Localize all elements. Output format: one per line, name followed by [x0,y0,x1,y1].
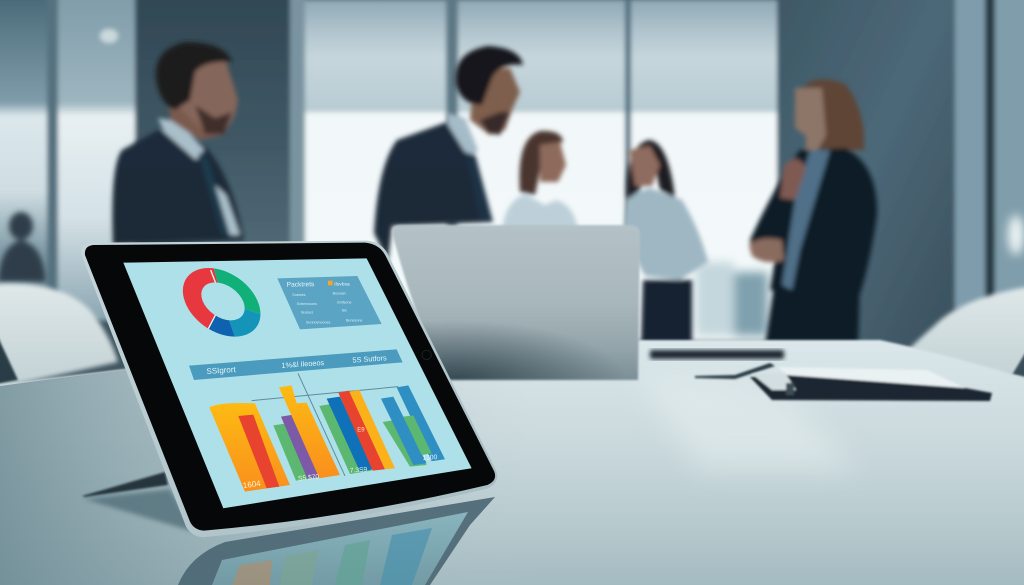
data table panel [277,276,382,329]
chair: left [0,284,118,388]
chair armrest: right dark accent [1012,345,1024,378]
tablet reflection on table [178,497,495,585]
data table panel: Sls [342,309,347,313]
chart header bar [189,349,403,380]
data table panel: Bnifsone [337,300,352,304]
chair: right [908,285,1024,382]
person: man in centre [374,46,523,262]
tablet with dashboard [81,241,497,537]
data table panel: Ilsvbsa [334,281,350,287]
background: windows and pillars [0,0,1024,390]
bar chart: 1604 [242,479,262,490]
data table panel: Susoes [301,310,313,314]
bar chart: S5 $70 [298,473,320,483]
bar chart [209,373,445,492]
chart header bar: SSIgrort [206,365,237,376]
data table panel: Bunesone [346,319,362,323]
chart header bar: 5S Sutfors [352,353,387,365]
bar chart: 7.3S9 [350,466,368,475]
data table panel: Bussian [333,291,346,295]
chair armrest: left dark accent [0,335,18,384]
person silhouette in left window [0,212,46,282]
tablet body frame [81,241,497,537]
person: woman in grey blouse [624,140,708,345]
laptop: back of lid [392,225,640,380]
tablet camera [422,350,431,360]
tablet stand and shadow [82,472,195,532]
data table panel: Sxtrevnoons [297,302,317,306]
data table panel: Sunnovnoones [306,320,331,324]
person: man on left [112,42,244,245]
tablet black bezel [85,243,495,531]
closed notebook on table [650,350,784,359]
data table panel: Sustoes [292,293,306,297]
bar chart: 1300 [422,454,438,462]
donut chart [182,268,260,337]
person: woman in white blouse [502,131,578,232]
chart header bar: 1%&l Ileoeos [281,358,325,370]
person: woman in dark blazer on right [749,79,877,345]
tablet screen [123,258,472,508]
tablet reflection: blurred bars [232,528,432,585]
distant reflections behind window [696,215,1024,336]
clipboard with papers and pen [695,363,992,401]
data table panel: Packtrets [287,281,315,289]
bar chart: E9 [357,428,365,434]
table surface [0,340,1024,585]
